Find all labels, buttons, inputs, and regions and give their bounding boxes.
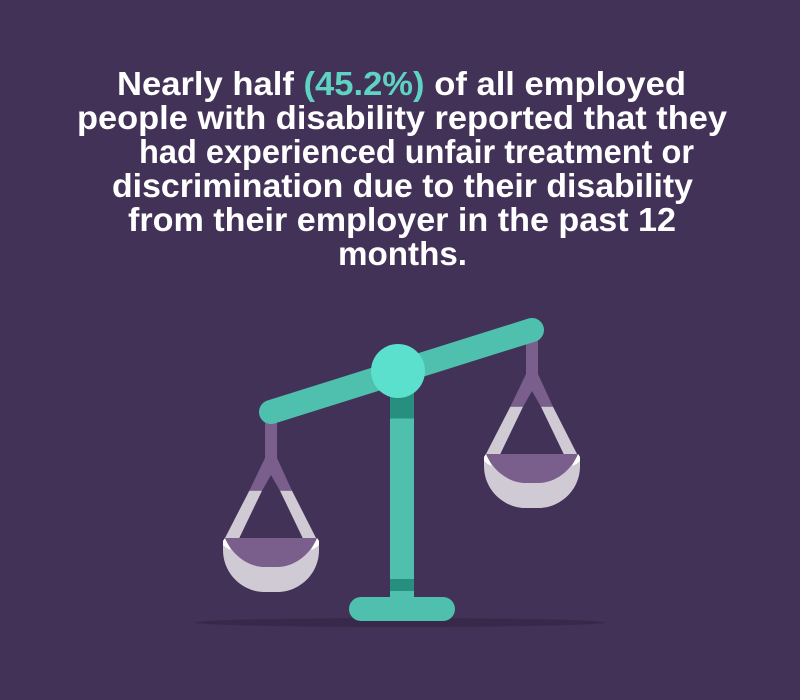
- icon: balance scale: [196, 326, 604, 627]
- right pan assembly: [484, 326, 580, 508]
- title text: discrimination due to their disability: [112, 167, 694, 204]
- left pan assembly: [223, 410, 319, 592]
- title text: [77, 65, 728, 272]
- beam: [271, 330, 532, 412]
- title text: had experienced unfair treatment or: [139, 133, 694, 170]
- stand: [349, 380, 455, 621]
- title text: people with disability reported that they: [77, 99, 728, 136]
- title text: from their employer in the past 12: [128, 201, 676, 238]
- title text: Nearly half (45.2%) of all employed: [117, 65, 686, 102]
- title text: months.: [338, 235, 467, 272]
- pivot: [371, 344, 425, 398]
- ground shadow: [196, 618, 604, 627]
